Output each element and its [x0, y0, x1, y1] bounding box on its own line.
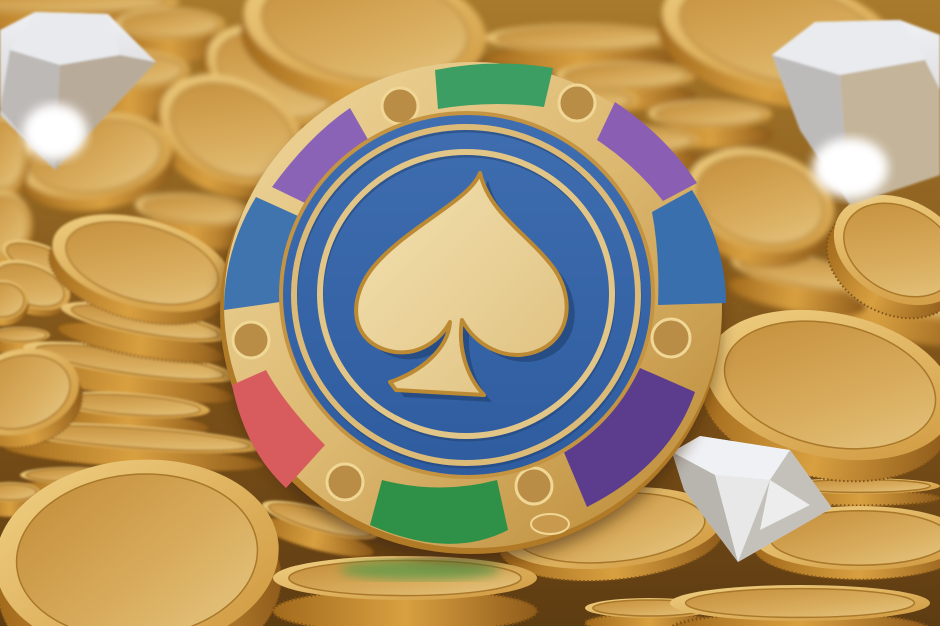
spade shadow [364, 180, 575, 402]
chip edge [220, 70, 722, 554]
segment: green bottom [370, 480, 508, 544]
chip outer ring [294, 127, 639, 466]
diamond: top left [0, 12, 156, 170]
background coins: mid-left stack [0, 197, 381, 565]
coin: upper right [808, 173, 940, 340]
chip inner ring [320, 152, 613, 439]
segment: blue left [224, 197, 298, 310]
chip foot dot [531, 514, 569, 534]
segment: purple upper right [597, 102, 697, 201]
spade [356, 173, 567, 395]
segment: green top [435, 63, 553, 109]
coins: lower centre and right [273, 478, 940, 626]
diamond: lower right [672, 436, 832, 562]
chip face [224, 62, 722, 548]
coin: large front lower left [0, 448, 289, 626]
chip dots [233, 85, 690, 504]
chip blue centre [279, 111, 655, 479]
segment: blue right [652, 190, 726, 305]
background coins: blurred upper pile [0, 0, 940, 359]
casino chip [220, 62, 726, 562]
segment: red lower left [232, 370, 325, 488]
diamond: top right [772, 20, 940, 205]
coin: right large [687, 288, 940, 503]
segment: purple lower right [563, 368, 695, 507]
chip shadow [220, 82, 720, 562]
segment: purple upper left [272, 108, 370, 203]
